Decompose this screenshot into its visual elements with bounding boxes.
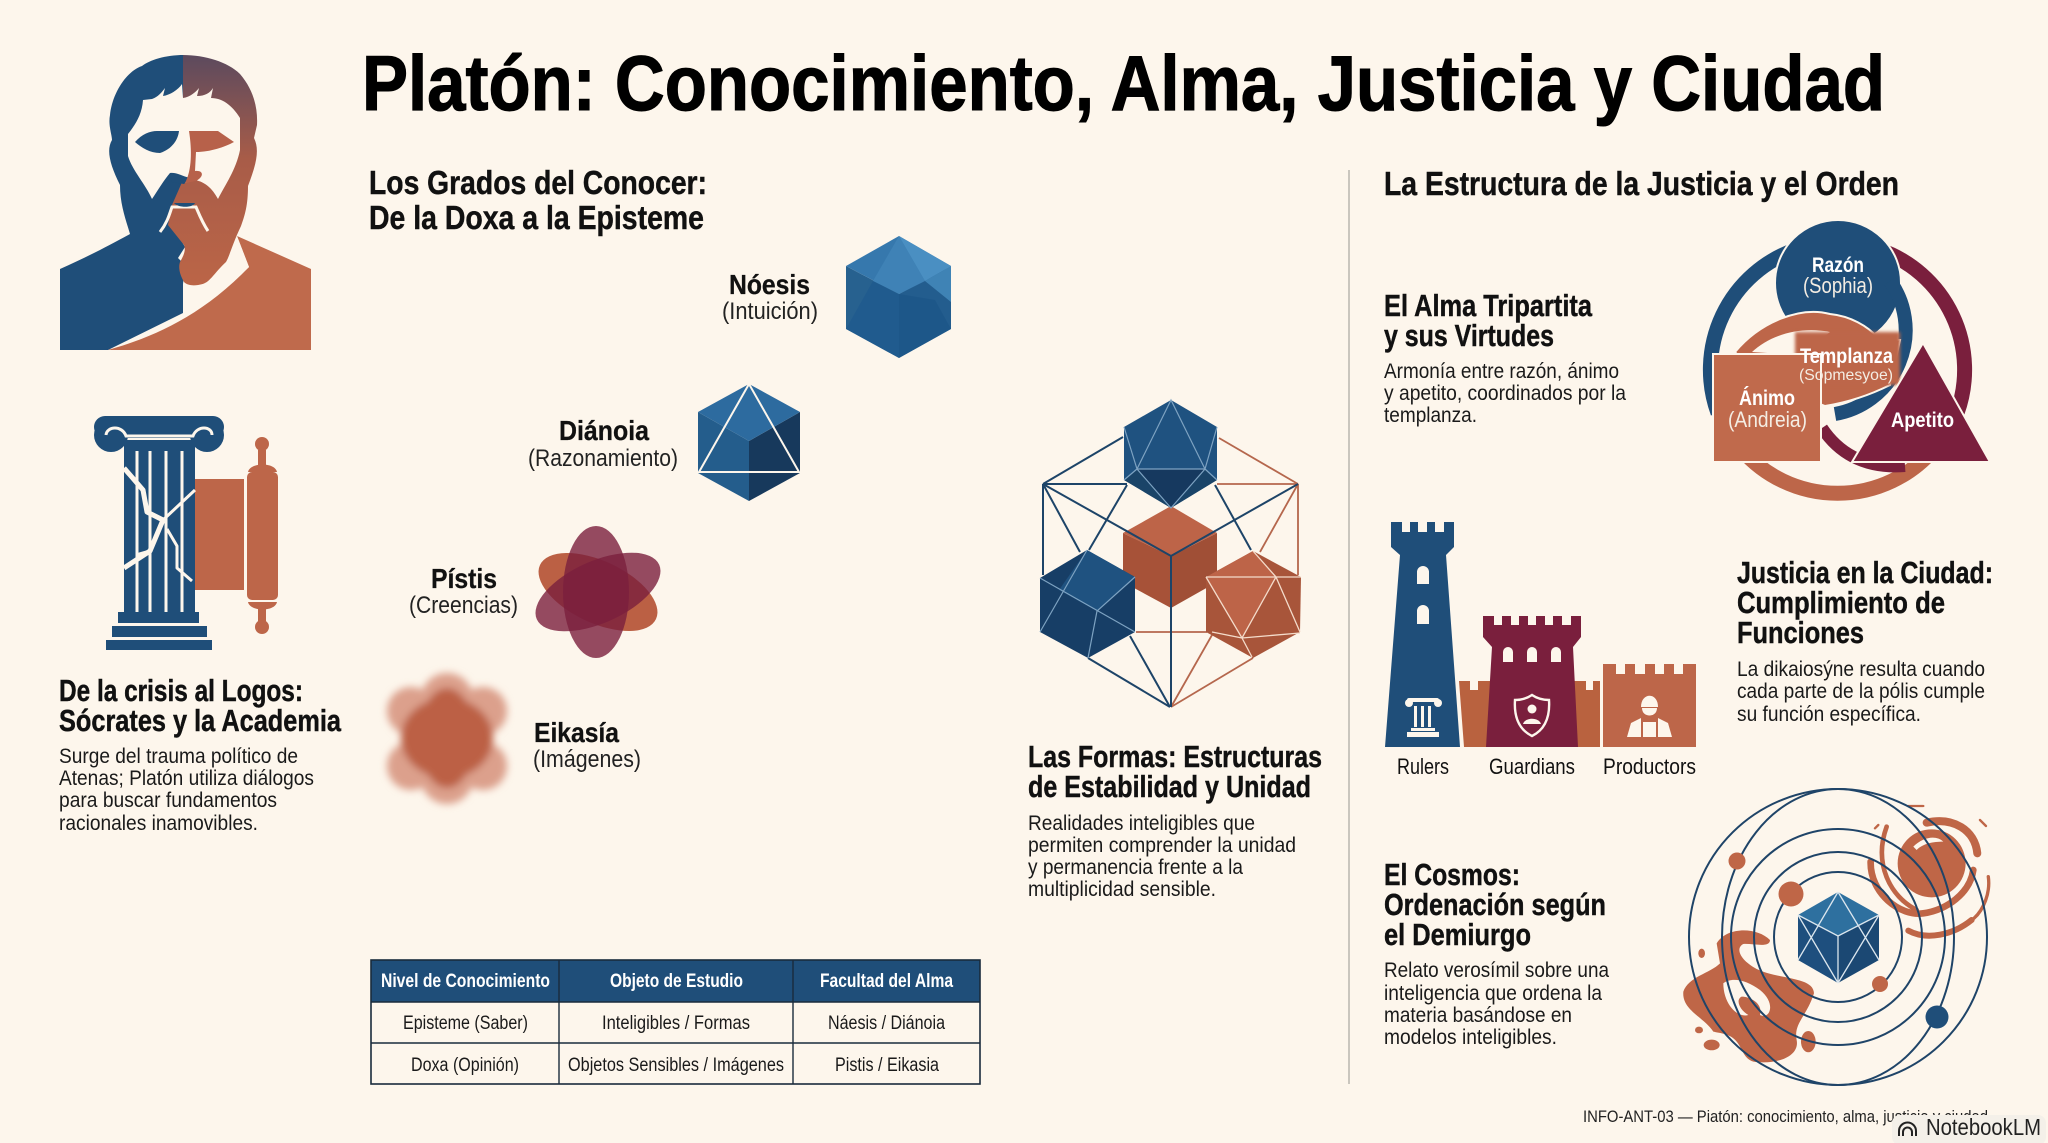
text block: Las Formas: de Estabilidad y Unidad <box>1028 769 1311 804</box>
text block: El Cosmos: materia basándose en <box>1384 1004 1572 1027</box>
level: Pístis: Pístis <box>431 563 497 594</box>
orbits <box>1689 789 1987 1085</box>
level: Pístis <box>409 526 672 658</box>
column <box>94 416 224 650</box>
text block: Justicia en la Ciudad <box>1737 555 1993 726</box>
right solid <box>1206 551 1301 658</box>
terracotta network lines <box>1136 438 1298 707</box>
Apetito triangle <box>1852 343 1990 462</box>
text block: De la crisis al Logos: Atenas; Platón utiliza diálogos <box>59 767 314 790</box>
diagram: cosmos <box>1683 789 1989 1085</box>
blue network lines <box>1043 437 1251 707</box>
diagram: city castle classes: Guardians <box>1489 754 1575 779</box>
text block: De la crisis al Logos: Sócrates y la Academia <box>59 703 342 738</box>
level: Nóesis: (Intuición) <box>722 298 818 325</box>
text block: Las Formas <box>1028 739 1322 901</box>
planets <box>1728 852 1948 1028</box>
heading: Los Grados del Conocer: De la Doxa a la Episteme <box>369 199 704 236</box>
table: levels of knowledge: Facultad del Alma <box>820 971 953 992</box>
Productors wall <box>1603 664 1696 747</box>
table: levels of knowledge: Objetos Sensibles / Imágenes <box>568 1055 784 1076</box>
text block: El Alma Tripartita: y apetito, coordinados por la <box>1384 382 1626 405</box>
text block: Las Formas: Realidades inteligibles que <box>1028 812 1255 835</box>
diagram: tripartite soul: (Sophia) <box>1803 273 1873 298</box>
footer reference: INFO-ANT-03 — Piatón: conocimiento, alma, justicia y ciudad <box>1583 1107 1988 1126</box>
inner terracotta ring <box>1735 312 1900 406</box>
text block: Justicia en la Ciudad: Funciones <box>1737 615 1864 650</box>
table: levels of knowledge: Pistis / Eikasia <box>835 1055 939 1076</box>
table: levels of knowledge: Doxa (Opinión) <box>411 1055 519 1076</box>
level: Pístis: (Creencias) <box>409 592 518 619</box>
table: levels of knowledge: Inteligibles / Formas <box>602 1013 750 1034</box>
outer rings <box>1710 250 1965 493</box>
diagram: city castle classes: Productors <box>1603 754 1696 779</box>
level: Nóesis: Nóesis <box>729 269 810 300</box>
text block: El Alma Tripartita: El Alma Tripartita <box>1384 288 1593 323</box>
table: levels of knowledge: Objeto de Estudio <box>610 971 743 992</box>
diagram: city castle classes <box>1385 522 1696 779</box>
Guardians tower <box>1483 616 1581 747</box>
center cube <box>1043 484 1298 608</box>
text block: Las Formas: permiten comprender la unidad <box>1028 834 1296 857</box>
text block: Las Formas: y permanencia frente a la <box>1028 856 1243 879</box>
text block: Justicia en la Ciudad: cada parte de la pólis cumple <box>1737 680 1985 703</box>
diagram: city castle classes: Rulers <box>1397 754 1449 779</box>
text block: El Alma Tripartita <box>1384 288 1626 427</box>
title: Platón: Conocimiento, Alma, Justicia y Ciudad <box>362 39 1885 127</box>
level: Eikasía <box>387 673 641 804</box>
text block: De la crisis al Logos <box>59 673 342 835</box>
heading: Los Grados del Conocer: Los Grados del Conocer: <box>369 164 707 201</box>
central polyhedron <box>1798 892 1879 983</box>
text block: El Cosmos: inteligencia que ordena la <box>1384 982 1602 1005</box>
diagram: tripartite soul: Razón <box>1812 254 1864 277</box>
text block: De la crisis al Logos: para buscar fundamentos <box>59 789 277 812</box>
icon: cracked column and scroll <box>94 416 278 650</box>
diagram: tripartite soul: (Andreia) <box>1728 407 1807 432</box>
Razón circle <box>1775 220 1901 346</box>
level: Diánoia <box>528 384 800 501</box>
table: levels of knowledge: Episteme (Saber) <box>403 1013 528 1034</box>
text block: De la crisis al Logos: racionales inamovibles. <box>59 812 258 835</box>
table: levels of knowledge <box>371 960 980 1084</box>
diagram: tripartite soul: (Sopmesyoe) <box>1799 367 1893 384</box>
text block: Justicia en la Ciudad: La dikaiosýne resulta cuando <box>1737 658 1985 681</box>
icon: column <box>1405 698 1442 737</box>
text block: Las Formas: Las Formas: Estructuras <box>1028 739 1322 774</box>
icon: Plato bust <box>60 55 311 350</box>
diagram: tripartite soul <box>1710 220 1990 493</box>
level: Eikasía: Eikasía <box>534 717 619 748</box>
inner burgundy ring <box>1822 428 1905 466</box>
walls <box>1459 681 1492 747</box>
text block: El Cosmos: el Demiurgo <box>1384 917 1531 952</box>
icon: shield <box>1515 695 1549 736</box>
top solid <box>1124 400 1217 508</box>
Rulers tower <box>1385 522 1460 747</box>
text block: El Cosmos: Ordenación según <box>1384 887 1606 922</box>
text block: De la crisis al Logos: De la crisis al Logos: <box>59 673 303 708</box>
table: levels of knowledge: Nivel de Conocimiento <box>381 971 550 992</box>
text block: Las Formas: multiplicidad sensible. <box>1028 878 1216 901</box>
heading: La Estructura de la Justicia y el Orden: La Estructura de la Justicia y el Orden <box>1384 165 1899 202</box>
left solid <box>1040 550 1135 658</box>
text block: El Cosmos: modelos inteligibles. <box>1384 1026 1557 1049</box>
inner blue ring <box>1835 281 1906 414</box>
text block: El Cosmos <box>1384 857 1609 1049</box>
diagram: Forms network of solids <box>1040 400 1301 707</box>
diagram: tripartite soul: Ánimo <box>1739 387 1795 410</box>
text block: El Cosmos: Relato verosímil sobre una <box>1384 959 1609 982</box>
level: Diánoia: Diánoia <box>559 415 649 446</box>
badge: NotebookLM <box>1892 1114 2046 1143</box>
diagram: tripartite soul: Templanza <box>1800 345 1893 368</box>
text block: Justicia en la Ciudad: Cumplimiento de <box>1737 585 1945 620</box>
text block: El Alma Tripartita: templanza. <box>1384 404 1477 427</box>
Ánimo square <box>1713 354 1821 462</box>
icon: worker <box>1627 696 1672 737</box>
table: levels of knowledge: Náesis / Diánoia <box>828 1013 945 1034</box>
level: Nóesis <box>722 236 951 358</box>
text block: Justicia en la Ciudad: su función específica. <box>1737 703 1921 726</box>
chaos blobs <box>1683 806 1989 1062</box>
text block: El Cosmos: El Cosmos: <box>1384 857 1520 892</box>
diagram: tripartite soul: Apetito <box>1891 409 1954 432</box>
text block: El Alma Tripartita: Armonía entre razón, ánimo <box>1384 360 1619 383</box>
text block: De la crisis al Logos: Surge del trauma político de <box>59 745 298 768</box>
level: Diánoia: (Razonamiento) <box>528 445 678 472</box>
text block: Justicia en la Ciudad: Justicia en la Ciudad: <box>1737 555 1993 590</box>
text block: El Alma Tripartita: y sus Virtudes <box>1384 318 1554 353</box>
level: Eikasía: (Imágenes) <box>533 746 641 773</box>
scroll <box>195 437 278 634</box>
heading: Los Grados del Conocer <box>369 164 707 236</box>
